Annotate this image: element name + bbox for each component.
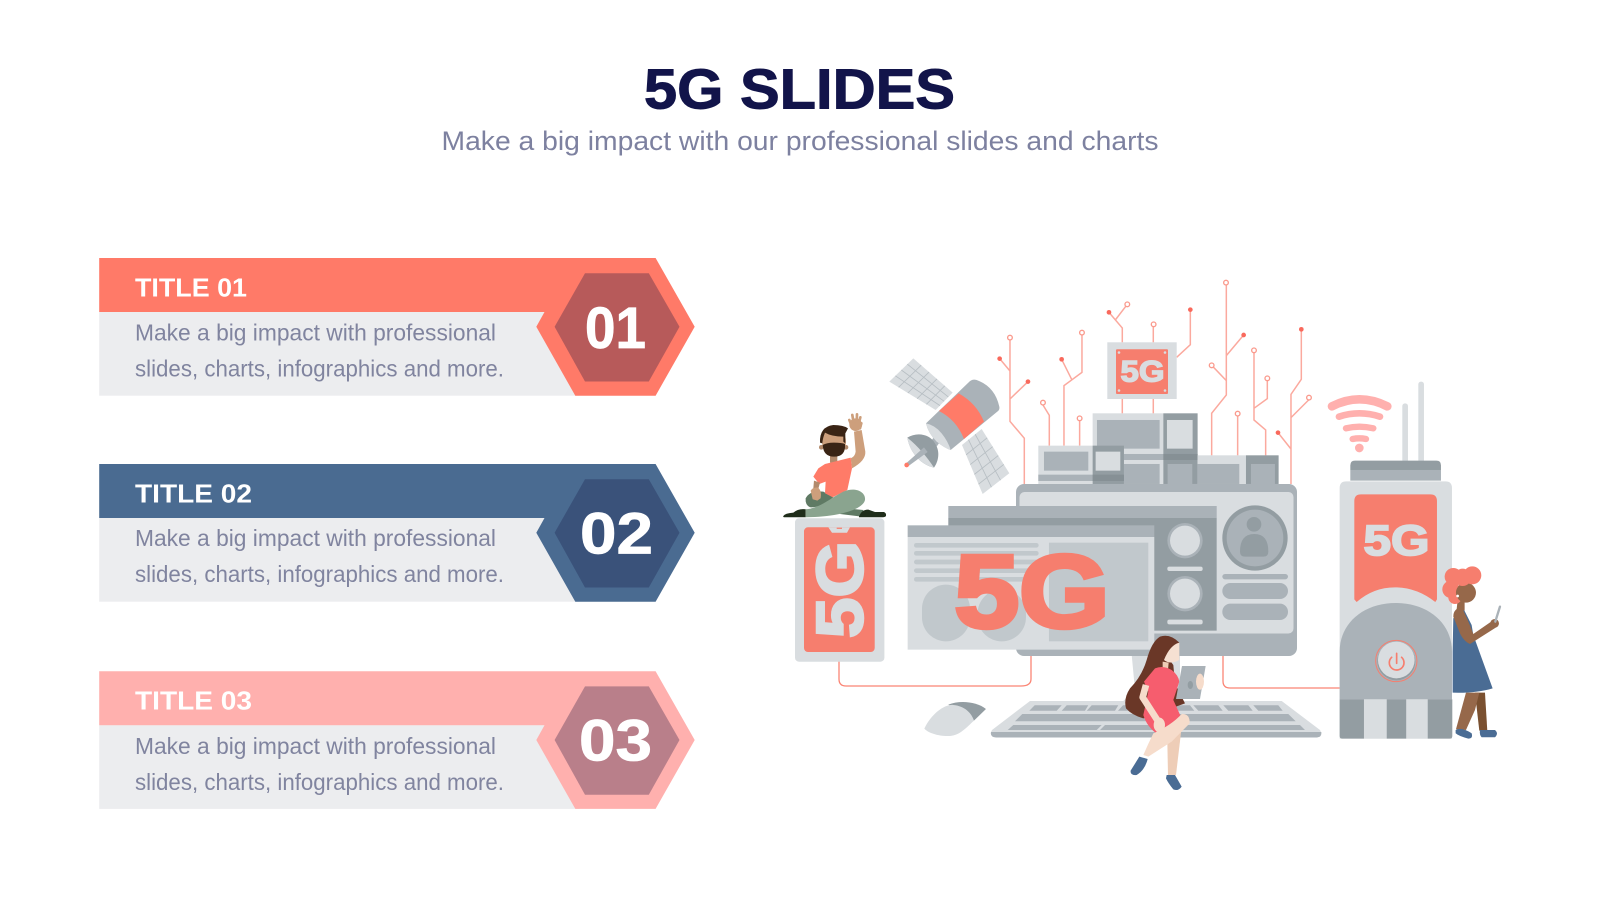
- dark strip: [948, 518, 1154, 526]
- number hexagon: [555, 273, 680, 382]
- panel: item 02: [99, 464, 695, 602]
- number: 03: [579, 709, 652, 774]
- router with antennas: [1340, 382, 1452, 739]
- text background: [99, 312, 579, 396]
- power button: [1376, 640, 1417, 682]
- small 5G sign: [1107, 342, 1177, 399]
- item title: TITLE 01: [135, 272, 247, 302]
- upper leg: [1143, 714, 1190, 757]
- antennas: [1350, 382, 1441, 481]
- item text line 2: slides, charts, infographics and more.: [135, 769, 504, 795]
- item text: Make a big impact with professional: [135, 319, 496, 345]
- shoes: [1456, 729, 1472, 739]
- hair: [1125, 636, 1185, 718]
- number: 02: [580, 502, 653, 566]
- monitor stand: [1119, 655, 1180, 705]
- arm: [1143, 685, 1158, 722]
- number: 01: [585, 296, 646, 361]
- tablet: [1176, 666, 1206, 699]
- arm: [1453, 607, 1498, 644]
- mouse: [924, 702, 986, 736]
- dress: [1143, 667, 1182, 735]
- dome: [1340, 603, 1452, 699]
- phone: [1495, 607, 1500, 622]
- top band: [948, 506, 1217, 518]
- panel: item 03: [99, 671, 695, 809]
- phone with 5G: [795, 518, 884, 662]
- face: [1164, 643, 1179, 662]
- subtitle: Make a big impact with our professional slides and charts: [442, 126, 1158, 156]
- item text: Make a big impact with professional: [135, 525, 496, 551]
- back leg: [1475, 693, 1487, 731]
- circuit lines right: [1177, 280, 1311, 484]
- dark side panel: [1154, 518, 1217, 631]
- item title: TITLE 02: [135, 478, 252, 508]
- big 5G: 5G: [954, 534, 1110, 649]
- hair top: [1445, 568, 1462, 585]
- title band and hexagon: [99, 671, 695, 809]
- item text: Make a big impact with professional: [135, 733, 496, 759]
- stripes: [1340, 699, 1452, 739]
- orange label: [1354, 494, 1437, 602]
- shoes: [1131, 757, 1148, 775]
- neck: [1457, 600, 1465, 611]
- title band and hexagon: [99, 258, 695, 396]
- illustration: 5G devices and people: [783, 280, 1500, 790]
- text background: [99, 725, 579, 809]
- browser window: [908, 525, 1154, 650]
- solar panel upper: [889, 358, 953, 410]
- router body: [1340, 481, 1452, 739]
- solar panel lower: [962, 429, 1009, 494]
- person waving, sitting on phone: [783, 414, 886, 517]
- item title: TITLE 03: [135, 686, 252, 716]
- number hexagon: [555, 686, 680, 795]
- dress: [1453, 608, 1493, 693]
- wifi icon: [1332, 399, 1387, 452]
- item text line 2: slides, charts, infographics and more.: [135, 355, 504, 381]
- title band and hexagon: [99, 464, 695, 602]
- title: 5G SLIDES: [644, 58, 955, 122]
- keyboard: [991, 701, 1321, 738]
- circuit lines left: [997, 302, 1156, 484]
- connector: [931, 433, 942, 447]
- dish: [907, 434, 938, 468]
- cables: [839, 655, 1340, 688]
- panel: item 01: [99, 258, 695, 396]
- woman with tablet: [1125, 636, 1206, 790]
- small devices on top of monitor: [1038, 413, 1279, 484]
- body: [926, 380, 999, 450]
- satellite: [889, 358, 1009, 494]
- router 5G text: 5G: [1364, 517, 1430, 565]
- head: [1456, 583, 1476, 603]
- small 5G sign: 5G: [1120, 356, 1164, 388]
- lower leg: [1167, 730, 1181, 775]
- phone with 5G: 5G: [802, 541, 876, 638]
- text background: [99, 518, 579, 602]
- front leg: [1456, 693, 1479, 730]
- monitor: [948, 484, 1297, 656]
- hair back: [1442, 581, 1460, 598]
- woman with phone and curly hair: [1442, 566, 1500, 739]
- profile panel: [1222, 505, 1288, 620]
- number hexagon: [555, 479, 680, 588]
- item text line 2: slides, charts, infographics and more.: [135, 561, 504, 587]
